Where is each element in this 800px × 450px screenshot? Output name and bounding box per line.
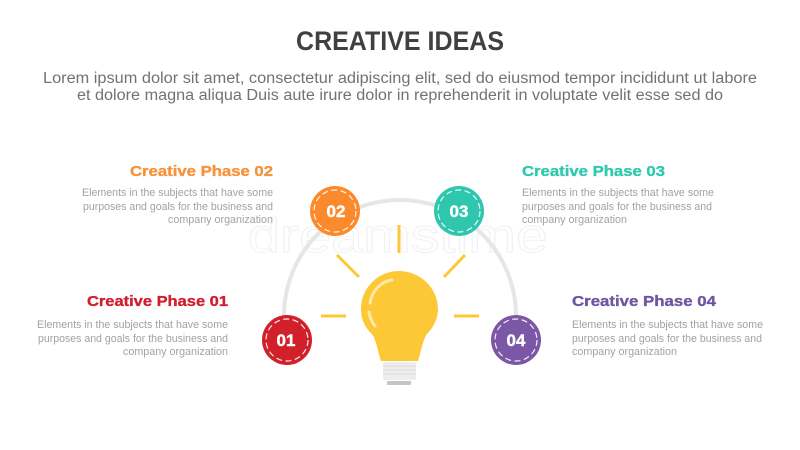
panel: phase 03: company organization — [522, 214, 627, 226]
panel: phase 02: purposes and goals for the business and — [83, 201, 273, 213]
panel: phase 04: Creative Phase 04 — [572, 293, 717, 310]
badge 01 — [262, 315, 312, 365]
panel: phase 02 — [82, 163, 273, 226]
badge 04 — [491, 315, 541, 365]
watermark: dreamstime — [248, 210, 548, 263]
panel: phase 02: company organization — [168, 214, 273, 226]
badge 03 — [434, 186, 484, 236]
panel: phase 04: purposes and goals for the business and — [572, 333, 762, 345]
badge 02: 02 — [327, 202, 345, 221]
panel: phase 02: Creative Phase 02 — [130, 163, 273, 180]
icon: light rays — [321, 225, 479, 316]
panel: phase 01: purposes and goals for the business and — [38, 333, 228, 345]
panel: phase 01: company organization — [123, 346, 228, 358]
title: CREATIVE IDEAS — [296, 26, 504, 56]
panel: phase 04 — [572, 293, 763, 358]
subtitle — [43, 70, 757, 104]
badge 04: 04 — [507, 331, 526, 350]
badge 03: 03 — [450, 202, 468, 221]
subtitle: Lorem ipsum dolor sit amet, consectetur adipiscing elit, sed do eiusmod tempor incididunt ut labore — [43, 70, 757, 87]
semicircle arc — [284, 200, 516, 316]
panel: phase 01: Creative Phase 01 — [87, 293, 228, 310]
subtitle: et dolore magna aliqua Duis aute irure dolor in reprehenderit in voluptate velit esse sed do — [77, 87, 723, 104]
panel: phase 03: Creative Phase 03 — [522, 163, 665, 180]
icon: light bulb — [361, 271, 438, 385]
panel: phase 01: Elements in the subjects that have some — [37, 319, 228, 331]
badge 01: 01 — [277, 331, 295, 350]
panel: phase 03 — [522, 163, 714, 226]
panel: phase 01 — [37, 293, 228, 358]
panel: phase 04: company organization — [572, 346, 677, 358]
panel: phase 02: Elements in the subjects that have some — [82, 187, 273, 199]
badge 02 — [310, 186, 360, 236]
panel: phase 03: Elements in the subjects that have some — [522, 187, 714, 199]
panel: phase 03: purposes and goals for the business and — [522, 201, 712, 213]
panel: phase 04: Elements in the subjects that have some — [572, 319, 763, 331]
